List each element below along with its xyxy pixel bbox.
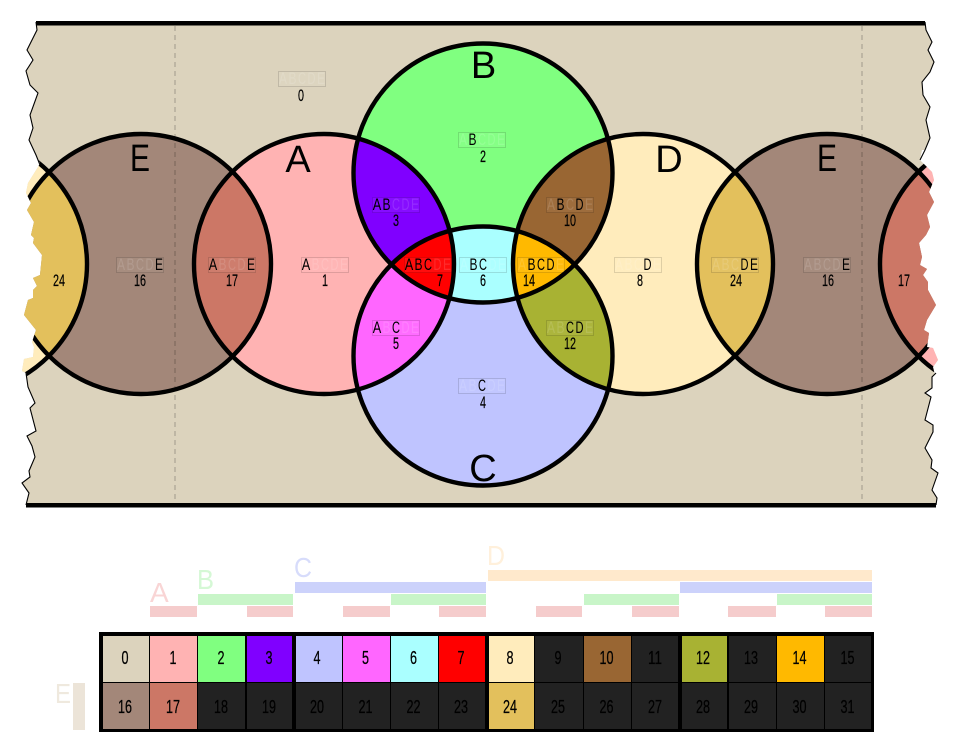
circle outlines (0, 44, 960, 486)
label: AB 3 (372, 196, 420, 230)
label: BD 10: E (585, 196, 593, 214)
legend: bit bars (55, 540, 872, 730)
label: CD 12: 12 (564, 335, 576, 353)
label: E 16 right: E (842, 256, 850, 274)
label: ABC 7: E (443, 256, 451, 274)
label: absent 0: D (308, 70, 316, 88)
grid row 1 cells (103, 636, 871, 682)
label: E 16 left: B (126, 256, 134, 274)
label: AC 5: D (402, 319, 410, 337)
label: E 16 right: 16 (822, 272, 834, 290)
label: D 8: 8 (637, 272, 643, 290)
label: BD 10: 10 (564, 212, 576, 230)
label: BCD 14: E (556, 256, 564, 274)
label: C 4: B (468, 377, 476, 395)
label: DE 24: 24 (730, 272, 742, 290)
label: C 4: E (497, 377, 505, 395)
label: absent 0: C (298, 70, 306, 88)
set heading A: A (285, 139, 311, 181)
label: BCD 14: 14 (523, 272, 535, 290)
label: AE 17: C (228, 256, 236, 274)
label: AB 3: D (402, 196, 410, 214)
label: ABC 7: 7 (437, 272, 443, 290)
set heading E left: E (130, 138, 150, 180)
grid row 2 numbers (118, 697, 854, 717)
label: AC 5: A (373, 319, 381, 337)
label: C 4: C (478, 377, 486, 395)
set A (194, 134, 960, 394)
grid row 1 numbers: 7 (458, 648, 464, 668)
venn regions (0, 26, 960, 503)
label: BC 6: D (488, 256, 497, 274)
label: BC 6: C (479, 256, 487, 274)
label: D 8: D (644, 256, 652, 274)
label: BCD 14 (518, 256, 564, 290)
label: E 16 left: 16 (134, 272, 146, 290)
label: E 16 left: C (136, 256, 144, 274)
label: C 4 (458, 377, 506, 412)
region BC (452, 228, 515, 300)
grid row 1 numbers: 11 (648, 648, 662, 668)
label: AC 5: E (411, 319, 419, 337)
bit letter D: D (487, 540, 505, 571)
label: DE 24: B (722, 256, 730, 274)
label: BC 6: A (460, 256, 468, 274)
fold lines (175, 26, 862, 503)
label: D 8: A (615, 256, 623, 274)
number: 24 left edge: 24 (53, 272, 65, 290)
label: B 2 (458, 131, 506, 166)
label: CD 12 (546, 319, 594, 353)
label: E 16 left: E (155, 256, 163, 274)
label: AE 17: A (209, 256, 217, 274)
label: D 8: B (624, 256, 632, 274)
region AB (356, 141, 447, 262)
label: ABC 7 (404, 256, 452, 290)
grid row 2 numbers: 19 (262, 697, 276, 717)
label: AE 17: 17 (226, 272, 238, 290)
label: D 8: E (653, 256, 661, 274)
label: BC 6: E (498, 256, 506, 274)
label: B 2: E (497, 131, 505, 149)
label: AB 3: A (373, 196, 381, 214)
set heading D: D (655, 139, 683, 181)
panel: Venn diagram band (0, 21, 960, 508)
grid row 2 numbers: 28 (696, 697, 710, 717)
grid row 1 numbers: 6 (410, 648, 417, 668)
label: B 2: B (468, 131, 476, 149)
grid row 2 numbers: 17 (166, 697, 180, 717)
region AE (196, 175, 936, 353)
grid row 2 numbers: 25 (551, 697, 565, 717)
label: BD 10: A (547, 196, 555, 214)
region DE (24, 176, 771, 352)
label: A 1: B (312, 256, 320, 274)
label: E 16 right (804, 256, 850, 290)
bit A bars (150, 606, 872, 617)
label: CD 12: B (556, 319, 564, 337)
label: absent 0: E (317, 70, 325, 88)
grid row 2 numbers: 23 (454, 697, 468, 717)
label: AB 3: B (382, 196, 390, 214)
label: ABC 7: D (434, 256, 442, 274)
grid row 2 numbers: 30 (792, 697, 806, 717)
label: A 1: D (330, 256, 339, 274)
label: BC 6 (460, 256, 506, 290)
bit C bars (295, 582, 872, 593)
region BCD (515, 234, 572, 295)
label: absent 0 (278, 70, 326, 105)
band background (22, 22, 938, 505)
label: CD 12: C (566, 319, 574, 337)
label: AC 5 (372, 319, 420, 353)
grid row 2 numbers: 27 (648, 697, 662, 717)
label: C 4: A (459, 377, 467, 395)
label: E 16 right: B (814, 256, 822, 274)
grid row 2 numbers: 16 (118, 697, 132, 717)
number: 17 right edge: 17 (898, 272, 910, 290)
label: BCD 14: C (537, 256, 545, 274)
label: BD 10: B (556, 196, 564, 214)
label: BC 6: B (470, 256, 478, 274)
label: AB 3: C (392, 196, 400, 214)
label: CD 12: D (576, 319, 584, 337)
torn band edges (22, 22, 938, 505)
set B (361, 46, 606, 228)
label: A 1: C (321, 256, 329, 274)
bit letter A: A (150, 577, 169, 608)
label: absent 0: 0 (298, 87, 304, 105)
grid row 1 numbers: 15 (840, 648, 854, 668)
grid row 1 numbers: 1 (170, 648, 176, 668)
label: C 4: 4 (480, 394, 486, 412)
bit D bar (488, 570, 872, 581)
label: B 2: A (459, 131, 467, 149)
grid row 1 numbers: 12 (696, 648, 710, 668)
label: BD 10: C (566, 196, 574, 214)
set E (11, 134, 957, 394)
grid row 1 numbers: 2 (218, 648, 224, 668)
grid row 1 numbers: 13 (744, 648, 758, 668)
label: DE 24 (712, 256, 758, 290)
label: ABC 7: A (405, 256, 413, 274)
grid row 2 numbers: 18 (214, 697, 228, 717)
label: absent 0: B (288, 70, 296, 88)
set heading C: C (469, 448, 497, 490)
label: AE 17 (208, 256, 256, 290)
set heading B: B (471, 45, 496, 87)
label: DE 24: D (740, 256, 749, 274)
grid row 2 numbers: 21 (358, 697, 372, 717)
grid row 2 numbers: 24 (503, 697, 517, 717)
set D (0, 134, 773, 394)
label: BD 10 (546, 196, 594, 230)
region ABC (394, 234, 452, 296)
label: A 1 (302, 256, 348, 290)
set C (360, 300, 606, 484)
label: A 1: E (340, 256, 348, 274)
label: B 2: D (488, 131, 496, 149)
label: A 1: A (302, 256, 310, 274)
label: AC 5: 5 (393, 335, 399, 353)
label: B 2: C (478, 131, 486, 149)
grid frame (99, 632, 874, 732)
label: D 8: C (634, 256, 642, 274)
label: E 16 right: A (804, 256, 812, 274)
region AC (356, 268, 447, 387)
legend: colour grid (99, 632, 874, 732)
label: AE 17: E (247, 256, 255, 274)
label: A 1: 1 (322, 272, 328, 290)
label: D 8 (614, 256, 662, 290)
label: E 16 left: D (146, 256, 154, 274)
label: DE 24: E (750, 256, 758, 274)
set heading E right: E (817, 138, 837, 180)
label: CD 12: A (547, 319, 555, 337)
bit letter B: B (197, 564, 214, 595)
label: AE 17: D (238, 256, 246, 274)
label: BCD 14: B (528, 256, 536, 274)
label: DE 24: C (731, 256, 739, 274)
label: AB 3: 3 (393, 212, 399, 230)
grid row 1 numbers: 10 (600, 648, 614, 668)
bit letter E: E (55, 678, 71, 709)
grid row 2 numbers: 29 (744, 697, 758, 717)
grid row 2 numbers: 22 (406, 697, 420, 717)
label: CD 12: E (585, 319, 593, 337)
bottom border (26, 503, 936, 508)
grid row 1 numbers: 9 (554, 648, 562, 668)
label: BCD 14: A (518, 256, 526, 274)
label: E 16 left: A (117, 256, 125, 274)
bit B bars (198, 594, 872, 605)
bit letter C: C (294, 552, 312, 583)
label: BCD 14: D (546, 256, 555, 274)
grid row 2 cells (103, 683, 871, 729)
grid row 1 numbers: 0 (122, 648, 128, 668)
label: DE 24: A (712, 256, 720, 274)
label: ABC 7: C (424, 256, 432, 274)
grid row 1 numbers: 8 (506, 648, 514, 668)
label: BD 10: D (576, 196, 584, 214)
region CD (520, 268, 610, 386)
label: AC 5: C (392, 319, 400, 337)
label: ABC 7: B (414, 256, 422, 274)
label: BC 6: 6 (480, 272, 486, 290)
region BD (520, 142, 610, 262)
bit E bar (73, 683, 85, 730)
label: absent 0: A (279, 70, 287, 88)
grid row 1 numbers: 5 (362, 648, 369, 668)
grid row 1 numbers (122, 648, 854, 668)
top border (36, 21, 925, 26)
label: AE 17: B (218, 256, 226, 274)
grid row 2 numbers: 31 (840, 697, 854, 717)
label: E 16 left (116, 256, 164, 290)
label: AC 5: B (382, 319, 390, 337)
label: C 4: D (488, 377, 496, 395)
label: E 16 right: C (823, 256, 831, 274)
label: B 2: 2 (480, 148, 486, 166)
grid row 1 numbers: 4 (314, 648, 320, 668)
label: AB 3: E (411, 196, 419, 214)
grid row 1 numbers: 14 (792, 648, 806, 668)
grid row 2 numbers: 26 (600, 697, 614, 717)
label: E 16 right: D (832, 256, 841, 274)
grid row 2 numbers: 20 (310, 697, 324, 717)
grid row 1 numbers: 3 (266, 648, 272, 668)
